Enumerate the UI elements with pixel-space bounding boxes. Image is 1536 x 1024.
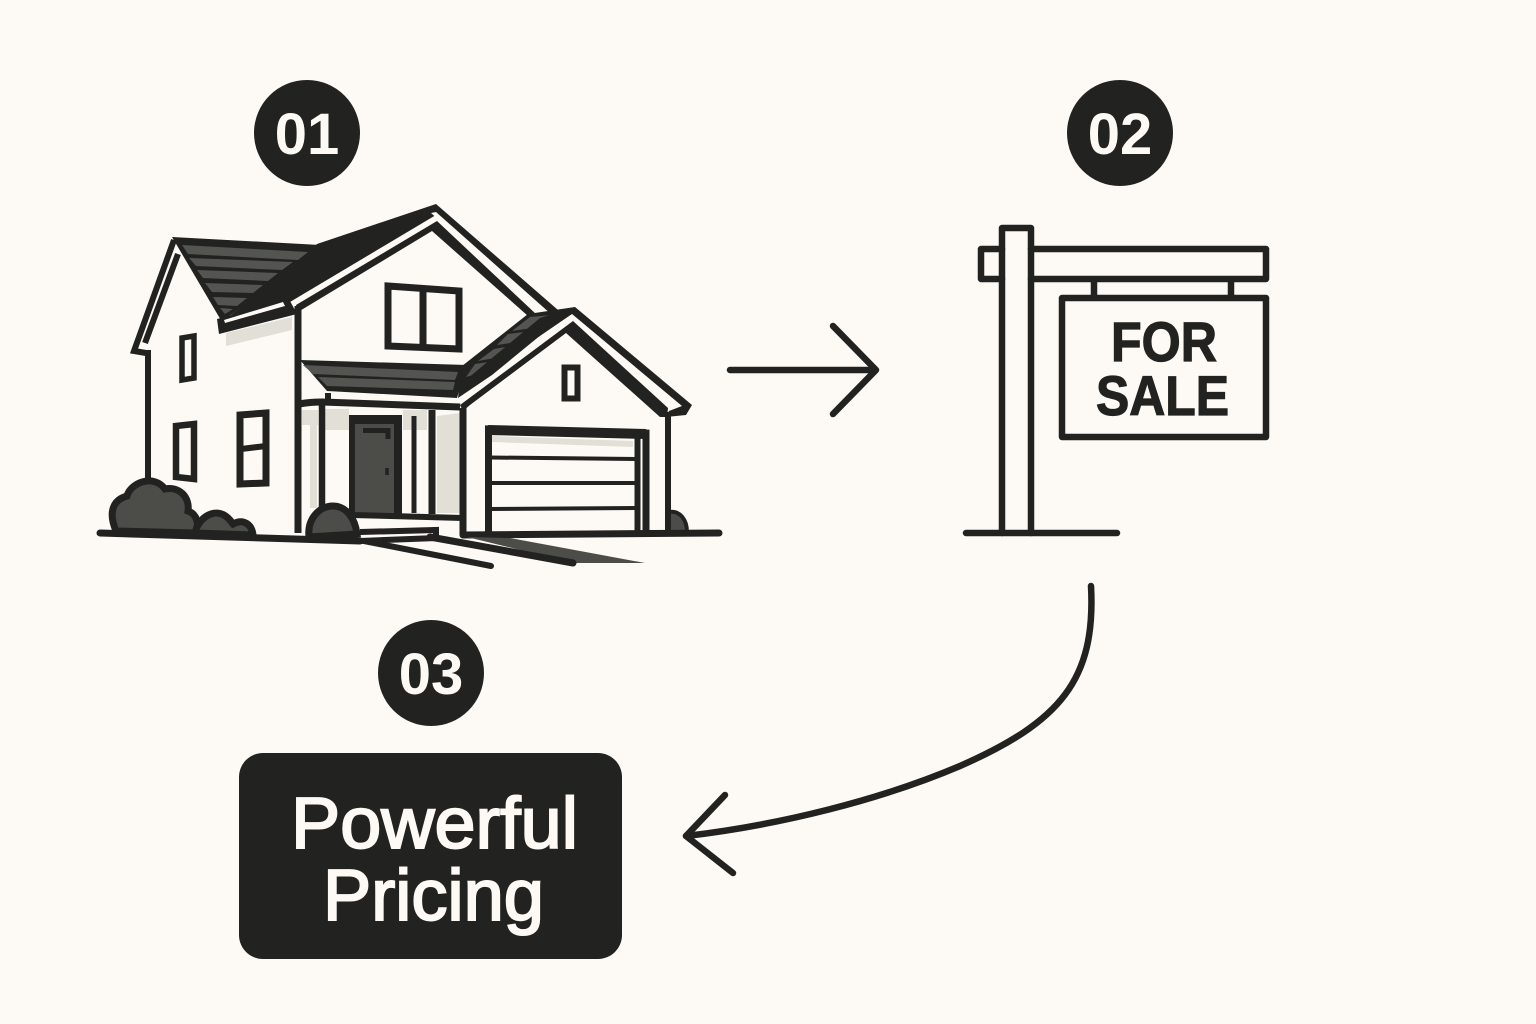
arrow: sign to pricing xyxy=(686,586,1091,873)
badge: step 02 xyxy=(1067,80,1173,186)
icon: house illustration xyxy=(100,204,719,566)
left wall windows xyxy=(182,336,194,380)
sign text: FOR xyxy=(1111,310,1217,373)
sign text xyxy=(1096,310,1229,427)
panel: powerful pricing: Powerful xyxy=(291,784,578,864)
badge: step 01 xyxy=(254,80,360,186)
porch beam and posts xyxy=(299,402,460,407)
porch roof xyxy=(300,307,575,398)
garage gable window xyxy=(564,368,578,398)
icon: for sale sign xyxy=(966,228,1266,533)
centre gable xyxy=(432,204,558,315)
badge: step 03: 03 xyxy=(399,642,463,707)
panel: powerful pricing xyxy=(239,753,622,959)
left gable outline xyxy=(134,240,174,353)
badge: step 02: 02 xyxy=(1088,102,1152,167)
light shading on the walls xyxy=(226,317,633,513)
left eave xyxy=(217,301,297,334)
panel: powerful pricing: Pricing xyxy=(323,856,544,936)
sign ground line xyxy=(966,530,1117,536)
sign text: SALE xyxy=(1096,364,1229,427)
garage gable xyxy=(461,307,692,417)
garage door xyxy=(488,429,646,533)
sign arm xyxy=(981,249,1266,279)
shrubs xyxy=(112,481,687,537)
hangers xyxy=(1094,280,1231,297)
porch steps xyxy=(352,515,463,518)
badge: step 01: 01 xyxy=(275,102,339,167)
sign board xyxy=(1062,298,1266,437)
driveway xyxy=(364,537,645,566)
left roof xyxy=(172,204,441,334)
upper window xyxy=(388,286,459,349)
badge: step 03 xyxy=(378,620,484,726)
sign post xyxy=(1002,228,1031,533)
arrow: house to sign xyxy=(730,326,876,414)
ground line xyxy=(100,533,719,541)
front door xyxy=(349,415,402,515)
